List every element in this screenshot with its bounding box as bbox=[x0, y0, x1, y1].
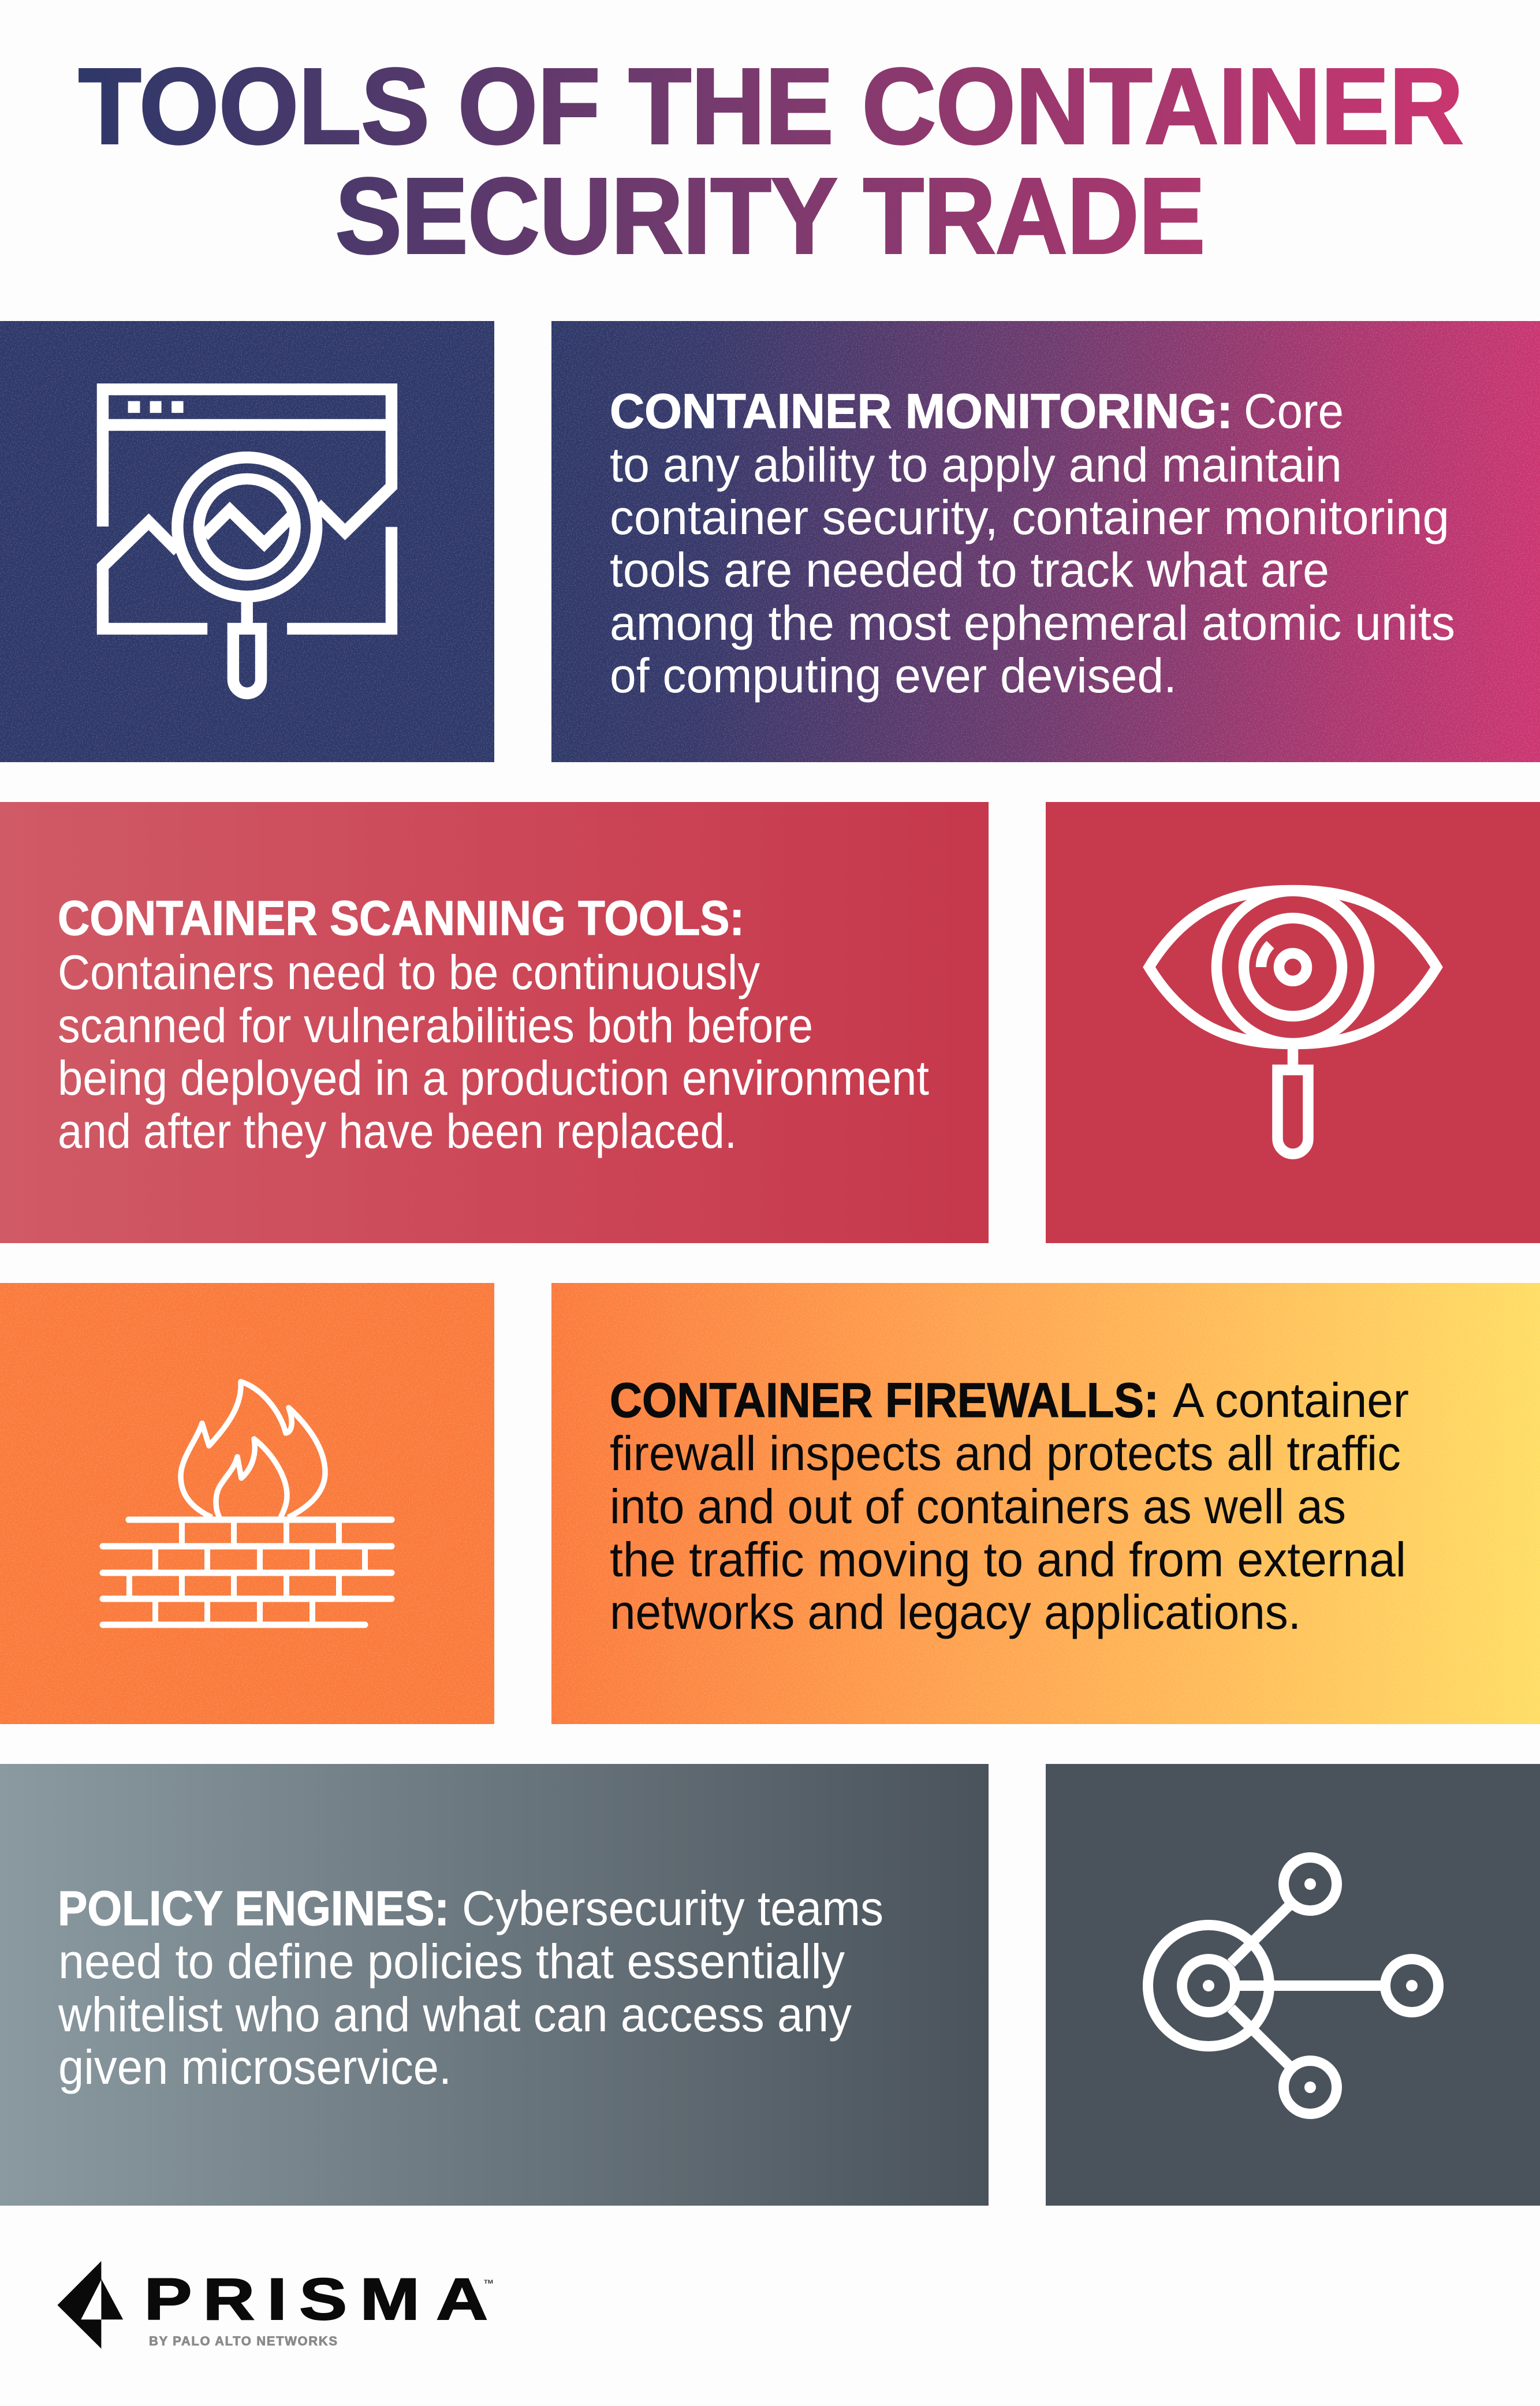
text: container monitoring bbox=[610, 384, 1455, 703]
text: container firewalls: into and out of containers as well as bbox=[610, 1479, 1346, 1534]
title bbox=[79, 47, 1463, 276]
text: container scanning tools: CONTAINER SCANNING TOOLS: bbox=[58, 891, 744, 945]
text: container scanning tools: Containers need to be continuously bbox=[58, 945, 760, 999]
text: container scanning tools: and after they have been replaced. bbox=[58, 1104, 737, 1158]
text: container scanning tools: being deployed in a production environment bbox=[58, 1051, 929, 1105]
text: policy engines: whitelist who and what can access any bbox=[58, 1987, 852, 2042]
icon: flames above brick wall bbox=[103, 1382, 391, 1625]
panel: container monitoring text bbox=[551, 321, 1540, 762]
title: TOOLS OF THE CONTAINER bbox=[79, 47, 1463, 166]
panel: policy engines icon bbox=[1046, 1764, 1540, 2206]
title: SECURITY TRADE bbox=[335, 156, 1205, 276]
text: container monitoring: CONTAINER MONITORING: bbox=[610, 384, 1233, 438]
text: container monitoring: of computing ever devised. bbox=[610, 648, 1177, 703]
text: container firewalls bbox=[610, 1373, 1409, 1639]
text: container monitoring: to any ability to apply and maintain bbox=[610, 438, 1342, 492]
panel: container monitoring icon bbox=[0, 321, 494, 762]
wordmark: PRISMA bbox=[144, 2267, 488, 2332]
text: container firewalls: A container bbox=[1173, 1373, 1409, 1427]
icon: browser window with magnifying glass over a line chart bbox=[103, 389, 391, 693]
text: policy engines: POLICY ENGINES: bbox=[58, 1881, 449, 1935]
text: container scanning tools: scanned for vulnerabilities both before bbox=[58, 998, 813, 1053]
panel: container scanning text bbox=[0, 802, 989, 1243]
panel: container firewalls icon bbox=[0, 1283, 494, 1724]
panel: policy engines text bbox=[0, 1764, 989, 2206]
panel: container scanning icon bbox=[1046, 802, 1540, 1243]
text: policy engines: Cybersecurity teams bbox=[462, 1881, 883, 1935]
icon: network hub with three nodes bbox=[1148, 1857, 1438, 2114]
text: policy engines: given microservice. bbox=[58, 2040, 452, 2094]
text: container firewalls: firewall inspects and protects all traffic bbox=[610, 1426, 1401, 1480]
text: container monitoring: among the most ephemeral atomic units bbox=[610, 596, 1455, 650]
text: container firewalls: CONTAINER FIREWALLS: bbox=[610, 1373, 1159, 1427]
panel: container firewalls text bbox=[551, 1283, 1540, 1724]
text: policy engines: need to define policies that essentially bbox=[58, 1934, 845, 1989]
tagline: BY PALO ALTO NETWORKS bbox=[149, 2334, 337, 2348]
text: container monitoring: container security, container monitoring bbox=[610, 490, 1449, 544]
logo: Prisma by Palo Alto Networks bbox=[57, 2261, 493, 2349]
trademark: TM bbox=[484, 2279, 493, 2285]
text: container scanning tools bbox=[58, 891, 929, 1158]
text: policy engines bbox=[58, 1881, 883, 2094]
text: container firewalls: the traffic moving to and from external bbox=[610, 1532, 1406, 1587]
text: container monitoring: Core bbox=[1244, 384, 1344, 438]
text: container monitoring: tools are needed to track what are bbox=[610, 543, 1329, 597]
icon: prisma logo mark bbox=[57, 2261, 123, 2349]
text: container firewalls: networks and legacy applications. bbox=[610, 1585, 1301, 1639]
icon: eye inside magnifying glass bbox=[1149, 890, 1437, 1154]
